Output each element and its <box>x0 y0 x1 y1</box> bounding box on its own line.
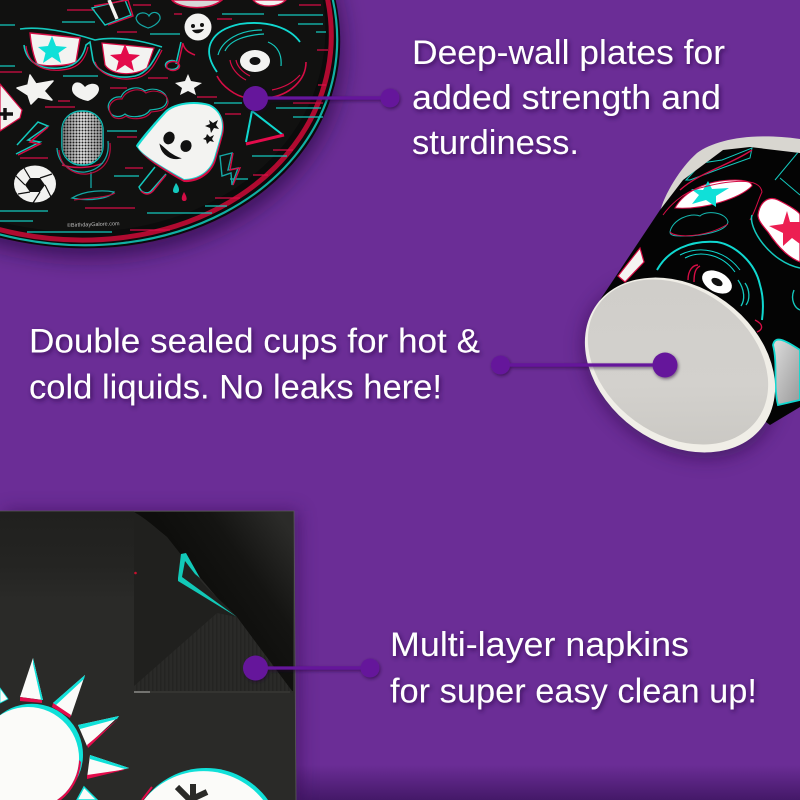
icon: triangle <box>246 111 284 144</box>
icon: white star <box>17 75 53 104</box>
callout: cup connector <box>491 352 678 378</box>
icon: second circle with asterisk <box>142 768 268 800</box>
napkin <box>0 511 300 800</box>
cup print: red arc <box>755 320 762 332</box>
cup print: vinyl <box>657 242 763 320</box>
text: plates: sturdiness. <box>412 124 579 162</box>
cup print: cyan star <box>691 181 729 207</box>
icon: teal corner on flap <box>178 553 237 617</box>
icon: heart <box>72 82 99 101</box>
icon: small white star <box>175 74 202 95</box>
plate <box>0 0 380 295</box>
plate dashes <box>0 5 328 232</box>
text: napkins <box>390 626 757 710</box>
icon: lightning bolt right <box>220 153 240 185</box>
cup print: top shape <box>686 148 752 180</box>
icon: gift box <box>92 0 133 25</box>
icon: sunglasses <box>20 28 162 79</box>
icon: outlined heart <box>136 12 160 28</box>
cup print: peeking white shape <box>618 248 644 282</box>
cup base <box>551 241 800 489</box>
icon: microphone <box>57 111 115 200</box>
text: plates: Deep-wall plates for <box>412 34 725 72</box>
icon: smiley <box>184 14 212 40</box>
napkin dark fold shadow <box>134 512 293 691</box>
text: napkins: Multi-layer napkins <box>390 626 689 664</box>
cup print: left lens <box>675 180 752 208</box>
copyright mark: ©BirthdayGalore.com <box>67 220 120 229</box>
icon: top shapes <box>172 0 286 8</box>
icon: camera shutter <box>14 166 56 203</box>
icon: lightning bolt left <box>16 122 48 155</box>
callout: plate connector <box>243 86 400 111</box>
icon: music note <box>166 42 195 70</box>
red star <box>110 44 140 71</box>
icon: sun <box>0 658 129 800</box>
cup <box>576 136 800 466</box>
text: plates <box>412 34 725 162</box>
icon: game device <box>0 84 22 131</box>
text: plates: added strength and <box>412 79 721 117</box>
cup print: right lens <box>758 199 800 262</box>
icon: cloud outline <box>108 88 168 119</box>
cup print: cloud <box>670 213 728 236</box>
icon: popsicle <box>136 102 224 201</box>
napkin flap <box>134 512 292 691</box>
icon: vinyl record <box>209 23 306 98</box>
cup print: red star <box>769 211 800 246</box>
cup print: right white shape <box>773 340 800 405</box>
callout: napkin connector <box>243 656 380 680</box>
cyan star <box>38 36 67 63</box>
text: cups: cold liquids. No leaks here! <box>29 368 442 406</box>
text: cups: Double sealed cups for hot & <box>29 322 480 360</box>
icon: red speck on flap <box>134 572 137 574</box>
text: cups <box>29 322 480 406</box>
flap lower panel <box>134 613 292 691</box>
text: napkins: for super easy clean up! <box>390 672 757 710</box>
